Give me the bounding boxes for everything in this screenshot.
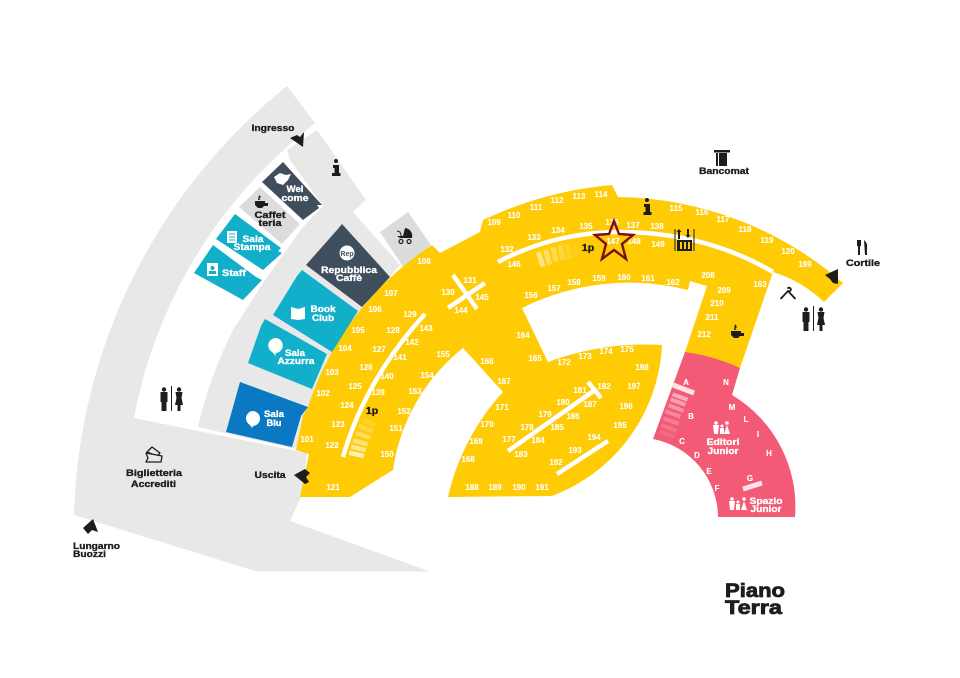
stand numbers: central block: 194 [587,433,601,442]
arrow: ingresso [290,132,304,147]
stand letters: junior area: I [757,430,759,439]
stand numbers: top arc: 119 [761,236,774,245]
stand numbers: top arc: 109 [487,218,501,227]
stand numbers: left wing: 103 [325,368,339,377]
stand numbers: left wing: 131 [463,276,477,285]
icon: star marker [595,221,633,259]
stand numbers: left wing: 108 [417,257,431,266]
stand letters: junior area: L [744,415,749,424]
label: Spazio Junior: Spazio [750,496,783,507]
stand numbers: top arc: 114 [595,190,608,199]
stand numbers: central block: 172 [557,358,571,367]
stand numbers: top arc: 110 [508,211,521,220]
stand numbers: central block: 175 [620,345,634,354]
title: Piano Terra: Piano [725,580,785,602]
stand numbers: top arc: 211 [706,313,719,322]
stand numbers: top arc: 149 [651,240,665,249]
title: Piano Terra [725,580,785,619]
room: Sala Azzurra [248,319,327,389]
icon: open book [291,307,305,320]
panel: inner corridor [198,130,400,450]
room: Repubblica Caffè [306,224,390,307]
label: Bancomat: Bancomat [699,166,750,177]
stand numbers: top arc: 163 [753,280,767,289]
label: Spazio Junior: Junior [750,504,782,515]
stand letters: junior area: D [694,451,700,460]
stand numbers: left wing [300,257,489,492]
room: Repubblica Caffè: Caffè [336,273,362,284]
stand letters: junior area: G [747,474,753,483]
icon: stroller [397,228,412,244]
room: Book Club: Club [312,313,334,324]
room: Sala Blu [226,382,308,447]
room: Book Club: Book [310,304,336,315]
stand numbers: left wing: 145 [475,293,489,302]
label: Lungarno Buozzi: Lungarno [73,541,120,552]
icon: elevator [674,229,694,251]
stand numbers: left wing: 142 [405,338,419,347]
label: 1p left: 1p [366,405,378,417]
stand numbers: central block: 181 [573,386,587,395]
stairs top [536,243,579,267]
arrow: cortile [825,269,838,284]
stand numbers: top arc: 132 [500,245,514,254]
arrow: lungarno [83,519,98,534]
stand numbers: top arc: 210 [710,299,724,308]
room: Sala Blu: Blu [266,418,282,429]
stand numbers: top arc: 159 [592,274,606,283]
stand numbers: central block: 188 [465,483,479,492]
stand numbers: central block: 182 [597,382,611,391]
stand numbers: top arc: 161 [641,274,655,283]
stand numbers: left wing: 139 [371,388,385,397]
room: Welcome: come [282,193,308,204]
stand numbers: left wing: 150 [380,450,394,459]
stand numbers: left wing: 106 [368,305,382,314]
stand numbers: top arc: 120 [781,247,795,256]
stand numbers: top arc: 162 [666,278,680,287]
room: Welcome [262,162,322,220]
stand numbers: left wing: 126 [359,363,373,372]
stand numbers: top arc: 147 [606,237,620,246]
stand numbers: left wing: 104 [338,344,352,353]
room: Staff: Staff [222,268,247,279]
stand letters: junior area: N [723,378,729,387]
room: Sala Azzurra: Azzurra [278,356,315,367]
stand numbers: left wing: 143 [419,324,433,333]
stand numbers: left wing: 154 [420,371,434,380]
icon: restrooms left [160,386,183,411]
icon: newspaper [227,231,237,243]
stairs left [349,418,376,458]
stand numbers: central block: 196 [619,402,633,411]
stand numbers: left wing: 130 [441,288,455,297]
stand numbers: top arc: 116 [696,208,709,217]
stand numbers: top arc: 158 [567,278,581,287]
stand numbers: left wing: 155 [436,350,450,359]
room: Caffetteria: Caffet [254,210,286,221]
stand numbers: left wing: 123 [331,420,345,429]
stand numbers: central block: 187 [583,400,597,409]
stand numbers: central block: 165 [528,354,542,363]
stand numbers: left wing: 102 [316,389,330,398]
label: Uscita: Uscita [254,470,286,481]
stand numbers: top arc: 146 [507,260,521,269]
stand numbers: central block: 168 [461,455,475,464]
stand letters: junior area [679,378,772,493]
stand numbers: top arc: 117 [717,215,730,224]
stand numbers: top arc: 111 [530,203,543,212]
stand numbers: left wing: 152 [397,407,411,416]
stand numbers: central block: 192 [549,458,563,467]
arrow: uscita [294,469,310,484]
stand numbers: central block [461,345,649,492]
stand numbers: central block: 167 [497,377,511,386]
icon: badge [207,263,218,276]
stand numbers: left wing: 122 [325,441,339,450]
stand numbers: top arc: 209 [717,286,731,295]
icon: fork and knife [857,240,867,255]
stand numbers: top arc [487,190,812,340]
label: Spazio Junior [729,496,783,515]
icon: hanger [781,288,795,298]
icon: bancomat [714,150,730,166]
icon: info corridor [332,159,340,176]
room: Sala Stampa: Stampa [234,242,271,253]
label: Editori Junior: Junior [708,446,739,457]
room: Book Club [273,270,358,352]
stand numbers: central block: 195 [613,421,627,430]
stand numbers: central block: 198 [635,363,649,372]
stand letters: junior area: H [766,449,772,458]
room: Welcome: Wel [286,184,304,195]
stand numbers: top arc: 208 [701,271,715,280]
stand numbers: central block: 178 [520,423,534,432]
stand numbers: left wing: 140 [380,372,394,381]
icon: restrooms right [802,306,825,331]
aisles [343,232,773,489]
label: 1p top: 1p [582,242,594,254]
stand numbers: top arc: 157 [547,284,561,293]
stand letters: junior area: M [729,403,736,412]
icon: people [729,497,747,510]
icon: speech bubble [268,338,283,356]
stand numbers: left wing: 105 [351,326,365,335]
stand numbers: top arc: 212 [697,330,711,339]
stand letters: junior area: A [683,378,689,387]
stand numbers: top arc: 113 [573,192,586,201]
panel: yellow exhibition hall [296,185,843,497]
panel: pink junior area [653,352,795,517]
stand numbers: top arc: 160 [617,273,631,282]
stand letters: junior area: C [679,437,685,446]
stairs pink [659,392,688,439]
stand numbers: central block: 189 [488,483,502,492]
icon: coffee cup [255,195,268,208]
room: Repubblica Caffè: Repubblica [321,265,378,276]
room: Sala Azzurra: Sala [285,348,306,359]
stand numbers: left wing: 124 [340,401,354,410]
stand numbers: top arc: 135 [579,222,593,231]
label: Biglietteria Accrediti: Accrediti [131,479,176,490]
stand numbers: central block: 191 [535,483,549,492]
label: Editori Junior [706,421,740,457]
stand numbers: central block: 177 [502,435,516,444]
icon: people [713,421,730,434]
stand letters: junior area: F [715,484,720,493]
icon: Rep bubble: Rep [340,251,354,258]
room: Sala Stampa [216,214,282,270]
stand numbers: top arc: 118 [739,225,752,234]
stand numbers: central block: 170 [480,420,494,429]
room: Caffetteria: teria [258,218,282,229]
stand numbers: central block: 166 [480,357,494,366]
stand numbers: central block: 179 [538,410,552,419]
panel: baby room [380,212,431,267]
stand numbers: central block: 190 [512,483,526,492]
stand numbers: top arc: 134 [551,226,565,235]
icon: handshake [274,173,291,185]
panel: outer entrance corridor [74,86,430,572]
stand numbers: top arc: 133 [527,233,541,242]
icon: info top [644,198,652,215]
stand numbers: central block: 173 [578,352,592,361]
stand numbers: top arc: 156 [524,291,538,300]
stand numbers: central block: 186 [566,412,580,421]
stand numbers: left wing: 151 [389,424,403,433]
icon: coffee cup [731,324,744,338]
stand numbers: top arc: 164 [516,331,530,340]
stand numbers: left wing: 141 [393,353,407,362]
stand numbers: central block: 180 [556,398,570,407]
label: Biglietteria Accrediti: Biglietteria [126,468,183,479]
stand numbers: top arc: 115 [670,204,683,213]
stand numbers: central block: 174 [599,347,613,356]
stand numbers: left wing: 127 [372,345,386,354]
stand numbers: top arc: 138 [650,222,664,231]
label: Cortile: Cortile [846,258,880,269]
room: Staff [194,245,262,300]
stand letters: junior area: E [706,467,712,476]
stand numbers: top arc: 137 [626,221,640,230]
stand numbers: central block: 197 [627,382,641,391]
label: Lungarno Buozzi: Buozzi [73,549,106,560]
stand numbers: left wing: 144 [454,306,468,315]
label: Ingresso: Ingresso [252,123,295,134]
stand numbers: left wing: 107 [384,289,398,298]
icon: ticket office [146,447,162,462]
label: Editori Junior: Editori [706,437,740,448]
stand numbers: left wing: 121 [326,483,340,492]
title: Piano Terra: Terra [725,597,782,619]
stand numbers: top arc: 112 [551,196,564,205]
stand numbers: central block: 193 [568,446,582,455]
stand numbers: top arc: 136 [605,218,619,227]
stand numbers: central block: 183 [514,450,528,459]
stand numbers: left wing: 101 [300,435,314,444]
room: Sala Stampa: Sala [242,234,264,245]
stand numbers: left wing: 153 [408,387,422,396]
stand numbers: central block: 171 [495,403,509,412]
label: Biglietteria Accrediti [126,468,183,490]
stand numbers: top arc: 148 [627,237,641,246]
label: Lungarno Buozzi [73,541,120,560]
stand numbers: central block: 169 [469,437,483,446]
stand numbers: left wing: 129 [403,310,417,319]
room: Sala Blu: Sala [264,409,285,420]
stand letters: junior area: B [688,412,694,421]
stand numbers: central block: 185 [550,423,564,432]
stand numbers: left wing: 128 [386,326,400,335]
stand numbers: left wing: 125 [348,382,362,391]
room: Caffetteria [239,187,300,244]
icon: speech bubble [246,411,260,428]
stand numbers: top arc: 199 [798,260,812,269]
stand numbers: central block: 184 [531,436,545,445]
